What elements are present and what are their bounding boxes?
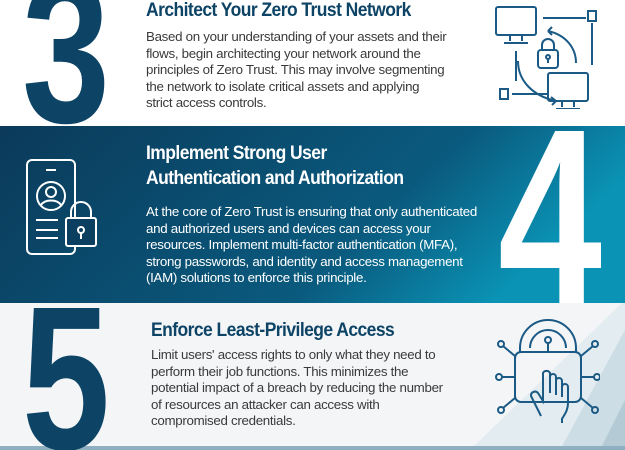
body 4	[146, 204, 477, 285]
body 3: Based on your understanding of your assets and their	[146, 29, 446, 44]
body 3	[146, 29, 446, 110]
body 3: principles of Zero Trust. This may involve segmenting	[146, 62, 444, 77]
body 4: and authorized users and devices can access your	[146, 221, 431, 236]
body 5: potential impact of a breach by reducing the number	[151, 380, 443, 395]
title 4	[146, 143, 403, 189]
body 3: flows, begin architecting your network around the	[146, 46, 421, 61]
title 4: Authentication and Authorization	[146, 168, 403, 189]
icon: phone user lock	[26, 159, 97, 255]
body 5: compromised credentials.	[151, 413, 295, 428]
body 5: Limit users' access rights to only what they need to	[151, 347, 435, 362]
body 4: resources. Implement multi-factor authentication (MFA),	[146, 237, 457, 252]
title 3: Architect Your Zero Trust Network	[146, 0, 411, 21]
body 5: of resources an attacker can access with	[151, 397, 379, 412]
icon: lock with hand	[495, 319, 600, 423]
title 4: Implement Strong User	[146, 143, 327, 164]
body 4: (IAM) solutions to enforce this principle.	[146, 270, 366, 285]
body 4: At the core of Zero Trust is ensuring that only authenticated	[146, 204, 477, 219]
body 5	[151, 347, 443, 428]
icon: network lock	[495, 6, 597, 109]
body 3: strict access controls.	[146, 95, 266, 110]
title 5: Enforce Least-Privilege Access	[151, 320, 394, 341]
body 5: perform their job functions. This minimizes the	[151, 364, 408, 379]
body 4: strong passwords, and identity and access management	[146, 254, 463, 269]
body 3: the network to isolate critical assets and applying	[146, 79, 419, 94]
